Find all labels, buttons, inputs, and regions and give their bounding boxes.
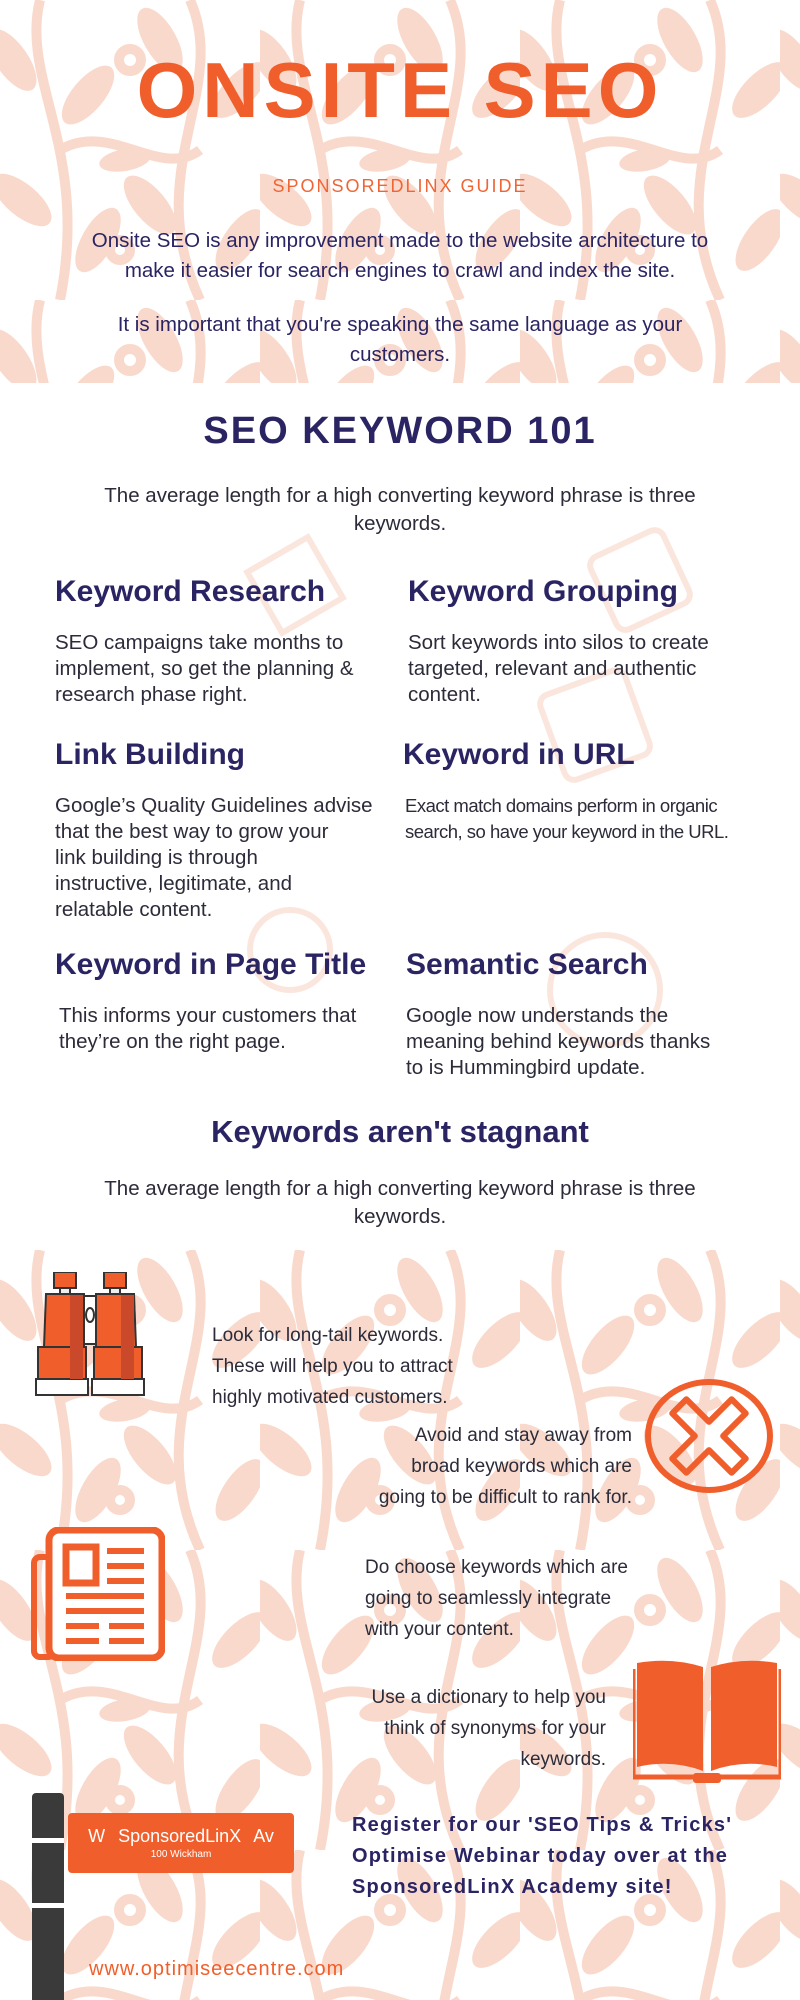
sign board: W SponsoredLinX Av xyxy=(88,1826,274,1846)
subheading: Keywords aren't stagnant xyxy=(211,1114,589,1149)
icon: book xyxy=(633,1660,781,1783)
section intro xyxy=(104,484,696,535)
call to action: SponsoredLinX Academy site! xyxy=(352,1876,673,1898)
card: Keyword Research: implement, so get the planning & xyxy=(55,657,354,680)
card: Link Building: that the best way to grow your xyxy=(55,820,328,843)
card: Keyword in URL: search, so have your keyword in the URL. xyxy=(405,821,728,842)
intro text: make it easier for search engines to crawl and index the site. xyxy=(125,259,675,282)
background pattern bottom xyxy=(0,1250,800,2000)
card: Keyword in Page Title: they’re on the right page. xyxy=(59,1030,286,1053)
card: Keyword Grouping: Keyword Grouping xyxy=(408,575,678,608)
call to action: Optimise Webinar today over at the xyxy=(352,1845,728,1867)
card: Keyword Research: SEO campaigns take months to xyxy=(55,631,343,654)
tip: dictionary: Use a dictionary to help you xyxy=(372,1687,606,1708)
subtitle: SPONSOREDLINX GUIDE xyxy=(272,176,528,196)
card: Keyword Research xyxy=(55,575,354,706)
icon: newspaper xyxy=(31,1527,165,1661)
tip: long-tail xyxy=(212,1325,453,1408)
tip: long-tail: These will help you to attract xyxy=(212,1356,453,1377)
card: Keyword Grouping: content. xyxy=(408,683,481,706)
title: ONSITE SEO xyxy=(137,46,663,134)
card: Keyword Grouping xyxy=(408,575,709,706)
icon: binoculars xyxy=(35,1272,145,1396)
card: Keyword Grouping: Sort keywords into silos to create xyxy=(408,631,709,654)
icon: x circle xyxy=(645,1379,773,1493)
card: Semantic Search: Google now understands the xyxy=(406,1004,668,1027)
card: Keyword in URL xyxy=(403,738,728,842)
card: Keyword in URL: Keyword in URL xyxy=(403,738,635,771)
card: Link Building: instructive, legitimate, and xyxy=(55,872,292,895)
card: Semantic Search xyxy=(406,948,710,1079)
card: Keyword Research: research phase right. xyxy=(55,683,248,706)
tip: broad keywords xyxy=(379,1425,632,1508)
tip: integrate: Do choose keywords which are xyxy=(365,1557,628,1578)
card: Keyword Research: Keyword Research xyxy=(55,575,325,608)
card: Keyword in URL: Exact match domains perform in organic xyxy=(405,795,717,816)
subheading text: keywords. xyxy=(354,1205,446,1228)
tip: dictionary: think of synonyms for your xyxy=(384,1718,606,1739)
card: Keyword in Page Title: Keyword in Page Title xyxy=(55,948,366,981)
card: Link Building: relatable content. xyxy=(55,898,212,921)
website url: www.optimiseecentre.com xyxy=(89,1958,344,1980)
section intro: The average length for a high converting keyword phrase is three xyxy=(104,484,696,507)
intro text: It is important that you're speaking the same language as your xyxy=(118,313,682,336)
card: Link Building: Google’s Quality Guidelines advise xyxy=(55,794,373,817)
tip: long-tail: highly motivated customers. xyxy=(212,1387,448,1408)
sign board: 100 Wickham xyxy=(151,1849,211,1860)
tip: dictionary: keywords. xyxy=(520,1749,606,1770)
tip: broad keywords: going to be difficult to rank for. xyxy=(379,1487,632,1508)
card: Semantic Search: meaning behind keywords thanks xyxy=(406,1030,710,1053)
subheading text: The average length for a high converting keyword phrase is three xyxy=(104,1177,696,1200)
tip: long-tail: Look for long-tail keywords. xyxy=(212,1325,443,1346)
tip: dictionary xyxy=(372,1687,606,1770)
tip: integrate: going to seamlessly integrate xyxy=(365,1588,611,1609)
card: Keyword in Page Title xyxy=(55,948,366,1053)
tip: integrate: with your content. xyxy=(365,1619,514,1640)
intro text: Onsite SEO is any improvement made to the website architecture to xyxy=(92,229,708,252)
intro text xyxy=(92,229,708,366)
card: Link Building xyxy=(55,738,373,921)
intro text: customers. xyxy=(350,343,450,366)
tip: integrate xyxy=(365,1557,628,1640)
icon: sign pole xyxy=(32,1793,64,2000)
card: Semantic Search: Semantic Search xyxy=(406,948,648,981)
faint icons xyxy=(243,527,693,1048)
call to action xyxy=(352,1814,732,1898)
card: Link Building: link building is through xyxy=(55,846,258,869)
card: Keyword in Page Title: This informs your customers that xyxy=(59,1004,356,1027)
tip: broad keywords: Avoid and stay away from xyxy=(415,1425,632,1446)
tip: broad keywords: broad keywords which are xyxy=(411,1456,632,1477)
background pattern top xyxy=(0,0,800,383)
call to action: Register for our 'SEO Tips & Tricks' xyxy=(352,1814,732,1836)
street sign xyxy=(32,1793,294,2000)
card: Link Building: Link Building xyxy=(55,738,245,771)
section intro: keywords. xyxy=(354,512,446,535)
sign board xyxy=(68,1813,294,1873)
section heading: SEO KEYWORD 101 xyxy=(203,410,597,452)
card: Semantic Search: to is Hummingbird update. xyxy=(406,1056,645,1079)
subheading text xyxy=(104,1177,696,1228)
card: Keyword Grouping: targeted, relevant and authentic xyxy=(408,657,696,680)
